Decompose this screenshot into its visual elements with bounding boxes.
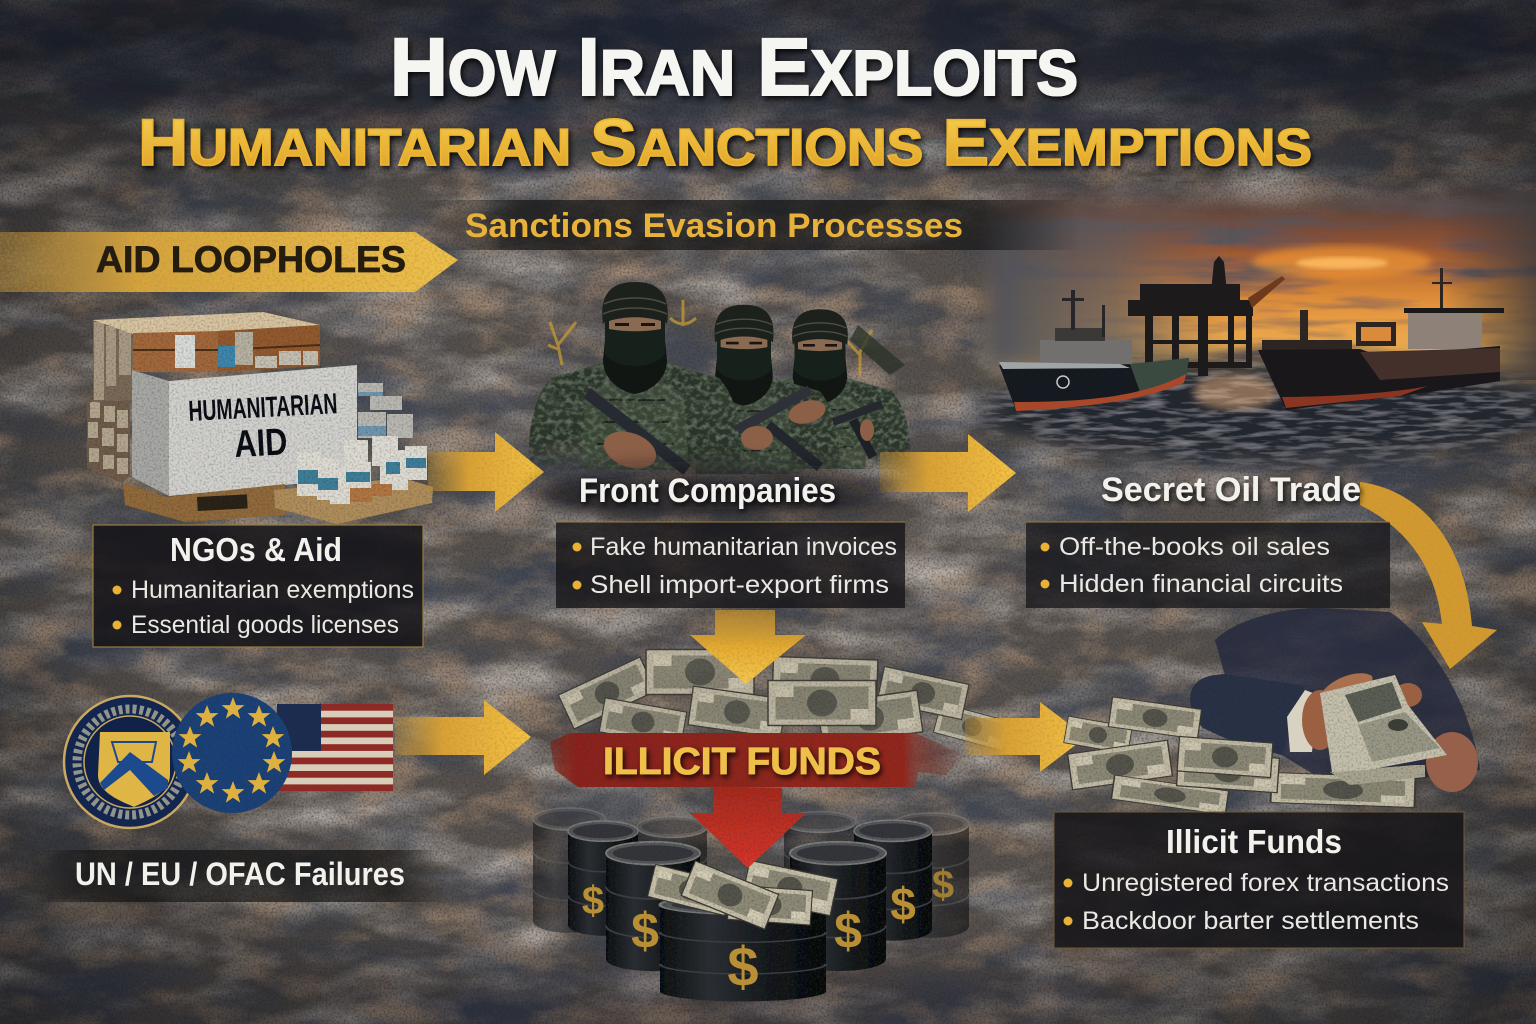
heading: secret oil trade: Secret Oil Trade	[1101, 471, 1361, 509]
panel: NGOs and aid	[93, 525, 423, 647]
red arrow: illicit funds to barrels	[690, 788, 806, 868]
illustration: humanitarian aid pallet: HUMANITARIAN	[188, 388, 338, 428]
title	[138, 22, 1312, 179]
illustration: oil barrels: $	[631, 903, 659, 959]
illustration: oil barrels: $	[727, 935, 759, 998]
illustration: oil barrels: $	[834, 903, 862, 959]
icon: EU flag circle	[172, 693, 292, 813]
title: HUMANITARIAN SANCTIONS EXEMPTIONS	[138, 105, 1312, 179]
illustration: tankers and oil platform	[999, 256, 1504, 411]
illustration: masked soldiers	[529, 282, 910, 475]
panel: front companies: Fake humanitarian invoices	[590, 533, 897, 561]
panel: secret oil trade: Hidden financial circuits	[1059, 570, 1343, 598]
illustration: cash pile above illicit funds	[558, 650, 1011, 751]
illustration: oil barrels: $	[890, 878, 916, 930]
sunset sky	[985, 190, 1536, 380]
illustration: oil barrels: $	[582, 879, 604, 923]
illustration: humanitarian aid pallet: AID	[233, 421, 288, 466]
panel: illicit funds	[1054, 812, 1464, 948]
panel: secret oil trade: Off-the-books oil sales	[1059, 533, 1330, 561]
banner: illicit funds	[550, 733, 965, 787]
label: UN EU OFAC failures: UN / EU / OFAC Failures	[75, 856, 405, 892]
panel: illicit funds: Unregistered forex transactions	[1082, 869, 1449, 897]
panel: dark area under soldiers	[532, 468, 892, 516]
illustration: oil barrels: $	[932, 863, 954, 907]
arrow: front companies to oil trade	[880, 434, 1016, 512]
panel: NGOs and aid: Humanitarian exemptions	[131, 576, 414, 604]
subtitle: Sanctions Evasion Processes	[465, 207, 963, 245]
label: UN EU OFAC failures	[30, 850, 450, 902]
arrow: aid to front companies	[428, 432, 544, 512]
illustration: US flag	[277, 704, 393, 791]
panel: NGOs and aid: NGOs & Aid	[170, 531, 342, 568]
sea	[980, 360, 1536, 464]
panel: illicit funds: Illicit Funds	[1166, 823, 1342, 860]
banner: illicit funds: ILLICIT FUNDS	[603, 741, 881, 783]
illustration: humanitarian aid pallet	[87, 312, 433, 524]
panel: illicit funds: Backdoor barter settlements	[1082, 907, 1419, 935]
panel: front companies	[556, 522, 905, 608]
panel: front companies: Shell import-export firms	[590, 571, 889, 599]
arrow: illicit funds to final funds	[965, 702, 1086, 772]
curved arrow: oil trade to illicit funds	[1360, 482, 1497, 669]
illustration: man counting cash	[1064, 608, 1480, 815]
heading: front companies: Front Companies	[579, 472, 836, 510]
banner: aid loopholes	[0, 232, 458, 292]
banner: aid loopholes: AID LOOPHOLES	[96, 239, 406, 280]
panel: NGOs and aid: Essential goods licenses	[131, 611, 399, 639]
title: HOW IRAN EXPLOITS	[390, 22, 1078, 113]
arrow: down to cash pile	[690, 610, 806, 684]
panel: secret oil trade	[1026, 522, 1390, 608]
illustration: oil barrels	[533, 808, 969, 1001]
icon: treasury seal	[64, 696, 196, 828]
arrow: regulators to illicit funds	[395, 700, 531, 775]
subtitle	[420, 200, 1080, 250]
